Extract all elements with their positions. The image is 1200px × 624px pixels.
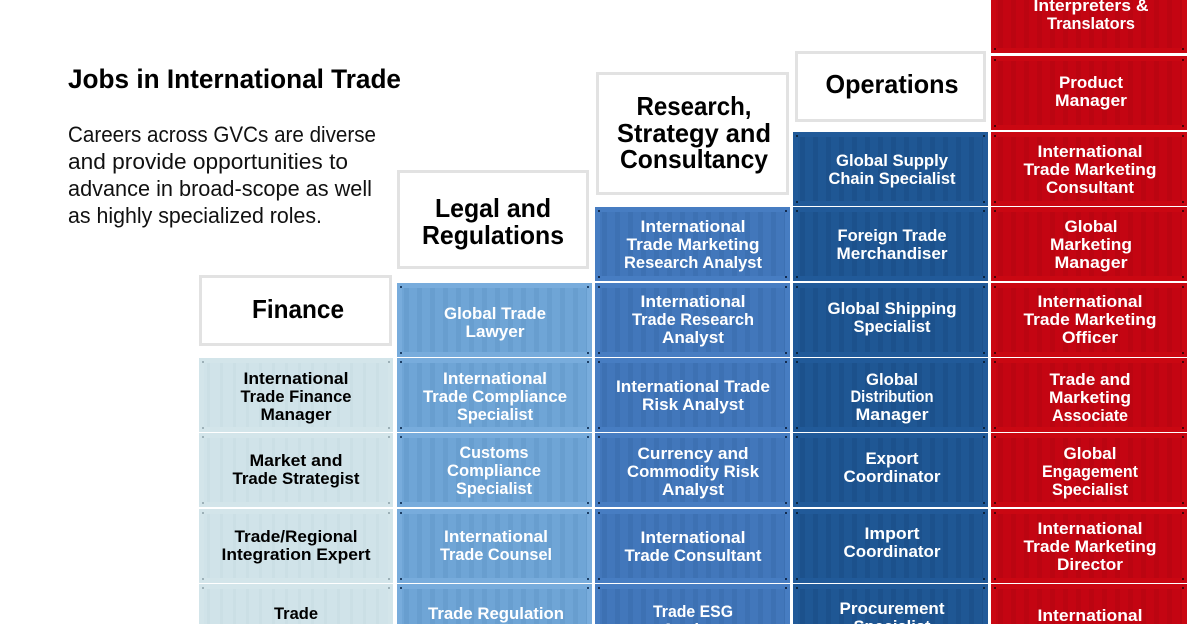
container: interpreters and translators: Translators (1047, 14, 1135, 33)
container: trade esg analyst: Trade ESG (653, 602, 733, 621)
heading: finance: Finance (252, 294, 344, 324)
container: interpreters and translators (991, 0, 1187, 53)
container: global marketing manager: Global (1064, 217, 1118, 236)
container: international trade consultant (595, 509, 790, 583)
container: international trade marketing officer: Trade Marketing (1024, 310, 1156, 329)
container: trade/regional integration expert: Integration Expert (222, 545, 371, 564)
container: market and trade strategist (199, 433, 393, 507)
container: global marketing manager (991, 207, 1187, 281)
container: global distribution manager: Distribution (850, 387, 934, 406)
intro text: advance in broad-scope as well (68, 176, 372, 201)
heading: research, strategy and consultancy: Strategy and (617, 118, 771, 148)
container: customs compliance specialist (397, 433, 592, 507)
container: international trade research analyst: Trade Research (632, 310, 754, 329)
container: trade regulation (397, 584, 592, 624)
container: global engagement specialist (991, 433, 1187, 507)
heading: research, strategy and consultancy (598, 74, 788, 194)
container: international trade compliance specialist: International (443, 369, 547, 388)
container: import coordinator: Import (864, 524, 920, 543)
container: customs compliance specialist: Specialist (456, 479, 532, 498)
container: international trade compliance specialist (397, 358, 592, 432)
container: export coordinator (793, 433, 988, 507)
container: currency and commodity risk analyst: Commodity Risk (627, 462, 760, 481)
container: international trade finance manager: Manager (260, 405, 332, 424)
column: research, strategy and consultancy (595, 74, 790, 624)
container: international trade finance manager: International (244, 369, 348, 388)
container: trade and marketing associate: Associate (1052, 406, 1128, 425)
column: marketing and sales (991, 0, 1187, 624)
container: global marketing manager: Marketing (1050, 235, 1132, 254)
container: international trade consultant: Trade Consultant (624, 546, 762, 565)
container: global supply chain specialist: Global Supply (836, 151, 949, 170)
container: currency and commodity risk analyst (595, 433, 790, 507)
container: trade/regional integration expert: Trade/Regional (234, 527, 358, 546)
container: international trade compliance specialist: Specialist (457, 405, 533, 424)
container: international trade marketing director (991, 509, 1187, 583)
container: trade (199, 584, 393, 624)
container: international trade research analyst: International (640, 292, 746, 311)
container: trade and marketing associate (991, 358, 1187, 432)
container: international trade research analyst (595, 283, 790, 357)
intro text: as highly specialized roles. (68, 203, 322, 228)
container: import coordinator (793, 509, 988, 583)
container: export coordinator: Export (866, 449, 919, 468)
container: international trade finance manager: Trade Finance (240, 387, 352, 406)
container: international trade marketing research analyst: International (640, 217, 746, 236)
container: currency and commodity risk analyst: Analyst (662, 480, 724, 499)
container: international trade marketing research analyst: Research Analyst (624, 253, 762, 272)
container: trade/regional integration expert (199, 509, 393, 583)
container: international trade marketing research analyst: Trade Marketing (626, 235, 760, 254)
container: product manager: Product (1059, 73, 1123, 92)
heading: operations: Operations (826, 69, 958, 99)
container: customs compliance specialist: Customs (460, 443, 528, 462)
container: international (991, 584, 1187, 624)
container: procurement specialist: Procurement (840, 599, 945, 618)
container: global engagement specialist: Global (1064, 444, 1116, 463)
heading: legal and regulations: Regulations (422, 220, 564, 250)
container: import coordinator: Coordinator (844, 542, 941, 561)
container: international trade counsel: Trade Counsel (440, 545, 552, 564)
heading: operations (796, 52, 984, 120)
container: international trade marketing consultant: International (1038, 142, 1142, 161)
container: trade and marketing associate: Marketing (1049, 388, 1131, 407)
container: international trade finance manager (199, 358, 393, 432)
container: trade: Trade (274, 604, 318, 623)
container: foreign trade merchandiser: Foreign Trade (838, 226, 946, 245)
column: legal and regulations (397, 172, 592, 624)
container: global engagement specialist: Specialist (1052, 480, 1128, 499)
container: international trade marketing officer: International (1038, 292, 1142, 311)
container: global trade lawyer: Lawyer (466, 322, 525, 341)
column: operations (793, 52, 988, 624)
intro text: and provide opportunities to (68, 149, 348, 174)
intro text: Careers across GVCs are diverse (68, 122, 376, 147)
container: trade and marketing associate: Trade and (1050, 370, 1130, 389)
container: global engagement specialist: Engagement (1042, 462, 1138, 481)
container: international trade marketing consultant: Consultant (1046, 178, 1134, 197)
container: international trade marketing officer: Officer (1062, 328, 1118, 347)
container: global distribution manager: Manager (856, 405, 929, 424)
container: export coordinator: Coordinator (844, 467, 941, 486)
heading: research, strategy and consultancy: Consultancy (620, 144, 769, 174)
container: foreign trade merchandiser (793, 207, 988, 281)
container: trade esg analyst (595, 584, 790, 624)
column: finance (199, 276, 393, 624)
container: international trade marketing consultant: Trade Marketing (1024, 160, 1156, 179)
container: international trade marketing director: International (1038, 519, 1142, 538)
container: market and trade strategist: Trade Strategist (232, 469, 360, 488)
container: international trade consultant: International (640, 528, 746, 547)
container: international trade compliance specialist: Trade Compliance (423, 387, 567, 406)
container: customs compliance specialist: Compliance (447, 461, 541, 480)
container: global trade lawyer (397, 283, 592, 357)
container: international trade marketing research analyst (595, 207, 790, 281)
container: international trade research analyst: Analyst (662, 328, 724, 347)
container: international trade risk analyst: Risk Analyst (642, 395, 744, 414)
container: international trade marketing director: Director (1057, 555, 1123, 574)
container: international trade risk analyst: International Trade (616, 377, 770, 396)
container: international trade counsel (397, 509, 592, 583)
heading: research, strategy and consultancy: Research, (636, 91, 752, 121)
container: global distribution manager (793, 358, 988, 432)
container: global supply chain specialist (793, 132, 988, 206)
container: international trade risk analyst (595, 358, 790, 432)
container: international trade counsel: International (444, 527, 548, 546)
container: procurement specialist (793, 584, 988, 624)
container: global shipping specialist: Global Shipping (828, 299, 956, 318)
container: international trade marketing officer (991, 283, 1187, 357)
container: global trade lawyer: Global Trade (444, 304, 546, 323)
heading: legal and regulations (398, 172, 588, 268)
container: foreign trade merchandiser: Merchandiser (836, 244, 948, 263)
container: global supply chain specialist: Chain Specialist (828, 169, 956, 188)
title: Jobs in International Trade (68, 64, 401, 94)
container: product manager (991, 56, 1187, 130)
container: international trade marketing director: Trade Marketing (1024, 537, 1156, 556)
container: global marketing manager: Manager (1054, 253, 1128, 272)
container: international trade marketing consultant (991, 132, 1187, 206)
container: trade regulation: Trade Regulation (428, 604, 564, 623)
heading: finance (200, 276, 390, 344)
container: product manager: Manager (1055, 91, 1127, 110)
intro text (68, 122, 376, 228)
container: market and trade strategist: Market and (250, 451, 342, 470)
container: global shipping specialist: Specialist (854, 317, 931, 336)
heading: legal and regulations: Legal and (435, 193, 551, 223)
container: global shipping specialist (793, 283, 988, 357)
container: currency and commodity risk analyst: Currency and (638, 444, 748, 463)
container: global distribution manager: Global (866, 370, 918, 389)
